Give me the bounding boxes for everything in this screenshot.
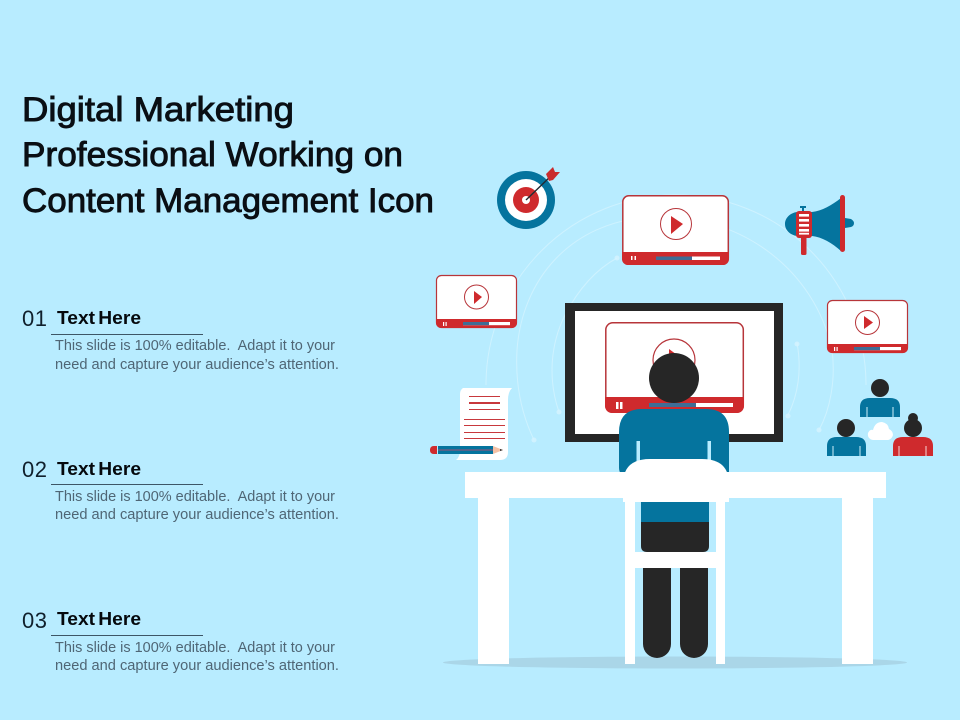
list item 03: need and capture your audience’s attention. [55, 658, 339, 674]
title: Digital Marketing [22, 91, 294, 129]
list item 03 [22, 608, 339, 674]
video player on monitor [605, 323, 744, 413]
list item 01: 01 [22, 306, 47, 331]
monitor [565, 303, 783, 442]
icon: megaphone [785, 195, 854, 255]
icon: document with pencil [430, 388, 512, 460]
list item 03: Text Here [57, 608, 141, 629]
title: Content Management Icon [22, 182, 434, 220]
list item 03: 03 [22, 608, 47, 633]
title [22, 91, 434, 220]
list item 01 [22, 306, 339, 373]
list item 01: Text Here [57, 307, 141, 328]
person at desk [619, 353, 729, 658]
list item 01: need and capture your audience’s attention. [55, 357, 339, 373]
icon: video player top [622, 196, 729, 265]
list item 02 [22, 457, 339, 523]
list item 02: Text Here [57, 458, 141, 479]
list item 02: This slide is 100% editable. Adapt it to your [55, 489, 335, 505]
chair [623, 459, 729, 664]
shadow under desk [443, 656, 907, 668]
list item 01: This slide is 100% editable. Adapt it to your [55, 338, 335, 354]
list item 02: 02 [22, 457, 47, 482]
list item 02: need and capture your audience’s attention. [55, 507, 339, 523]
icon: video player right [827, 300, 908, 353]
icon: audience group [827, 379, 933, 456]
icon: video player left [436, 276, 517, 328]
title: Professional Working on [22, 136, 403, 174]
list item 03: This slide is 100% editable. Adapt it to your [55, 640, 335, 656]
icon: target with arrow [497, 167, 560, 229]
desk [465, 472, 886, 664]
